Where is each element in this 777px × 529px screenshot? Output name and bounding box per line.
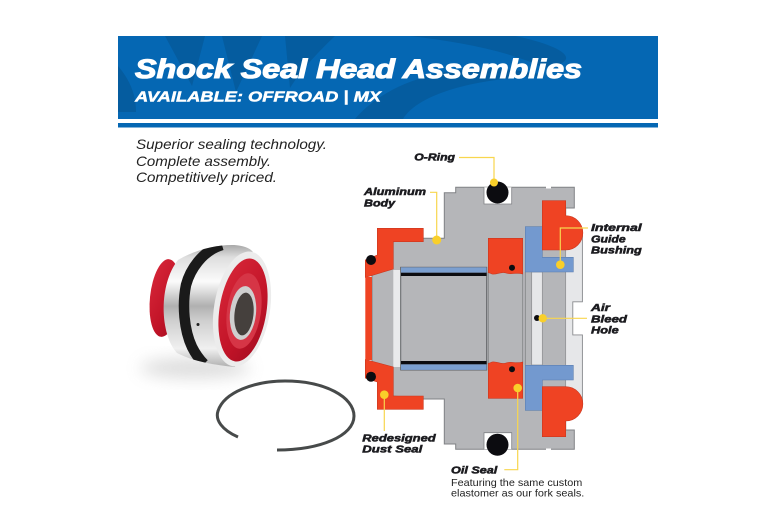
upper red wiper bbox=[542, 201, 583, 250]
leader: air bleed hole bbox=[538, 314, 587, 322]
o-ring bbox=[184, 245, 222, 364]
o-ring sections bbox=[486, 182, 508, 456]
guide bore bbox=[232, 292, 256, 336]
label: internal guide bushing bbox=[591, 222, 643, 257]
lower bore seal line bbox=[401, 361, 486, 364]
leader: oil seal bbox=[504, 384, 522, 470]
right-side light channels bbox=[532, 233, 582, 404]
upper guide bushing bbox=[525, 227, 573, 272]
front rim bbox=[205, 247, 279, 371]
seal-head top and bottom notches bbox=[546, 186, 551, 450]
label: air bleed hole: Hole bbox=[591, 325, 619, 337]
lower red wiper bbox=[542, 387, 583, 437]
upper oil seal bbox=[488, 238, 523, 274]
silver cylinder bbox=[164, 245, 253, 367]
cutaway diagram bbox=[365, 182, 583, 456]
intro text: Competitively priced. bbox=[136, 169, 277, 185]
lower oil seal bbox=[488, 362, 523, 398]
header rule bbox=[118, 123, 658, 128]
air hole bbox=[196, 323, 200, 326]
red back seal bbox=[146, 258, 184, 338]
photo: seal head assembly bbox=[140, 245, 279, 378]
upper dust seal bbox=[365, 228, 423, 278]
lower bushing bbox=[401, 364, 486, 370]
label: oil seal: elastomer as our fork seals. bbox=[451, 488, 584, 500]
aluminum body bbox=[372, 187, 582, 449]
leader: aluminum body bbox=[430, 192, 441, 244]
shadow bbox=[140, 358, 250, 378]
label: internal guide bushing: Guide bbox=[591, 233, 626, 245]
label: oil seal: Featuring the same custom bbox=[451, 477, 583, 489]
left red strip bbox=[365, 277, 372, 360]
label: oil seal bbox=[451, 464, 584, 500]
inner red face bbox=[222, 271, 266, 351]
guide bore rim bbox=[227, 285, 259, 341]
lower dust seal bbox=[365, 360, 423, 409]
small black seal dots bbox=[366, 255, 540, 382]
label: air bleed hole: Bleed bbox=[591, 313, 628, 325]
o-ring grooves bbox=[484, 187, 512, 449]
intro text bbox=[136, 136, 327, 185]
label: air bleed hole bbox=[590, 302, 628, 337]
leader: o-ring bbox=[459, 158, 498, 186]
leader: guide bushing bbox=[556, 228, 588, 269]
label: oil seal: Oil Seal bbox=[451, 464, 499, 476]
upper bore seal line bbox=[401, 273, 486, 276]
central bore bbox=[401, 267, 487, 370]
body inner grooves bbox=[488, 272, 525, 365]
intro text: Complete assembly. bbox=[136, 153, 271, 169]
intro text: Superior sealing technology. bbox=[136, 136, 327, 152]
banner swoosh pattern bbox=[118, 36, 566, 119]
upper bushing bbox=[401, 267, 486, 273]
label: internal guide bushing: Bushing bbox=[591, 245, 642, 257]
label: redesigned dust seal: Dust Seal bbox=[362, 444, 424, 456]
leader: dust seal bbox=[380, 390, 389, 431]
label: redesigned dust seal: Redesigned bbox=[362, 433, 436, 445]
photo: snap ring bbox=[217, 381, 354, 450]
bore left light strip bbox=[393, 270, 401, 367]
lower guide bushing bbox=[525, 365, 573, 410]
label: o-ring: O-Ring bbox=[414, 152, 456, 164]
label: aluminum body: Body bbox=[364, 197, 396, 209]
label: aluminum body bbox=[363, 186, 426, 209]
title: Shock Seal Head Assemblies bbox=[135, 54, 582, 84]
header banner bbox=[118, 36, 658, 119]
front red seal bbox=[212, 255, 274, 365]
label: redesigned dust seal bbox=[362, 433, 436, 456]
subtitle: AVAILABLE: OFFROAD | MX bbox=[134, 88, 382, 106]
label: internal guide bushing: Internal bbox=[591, 222, 643, 234]
label: air bleed hole: Air bbox=[590, 302, 611, 314]
label: aluminum body: Aluminum bbox=[363, 186, 426, 198]
